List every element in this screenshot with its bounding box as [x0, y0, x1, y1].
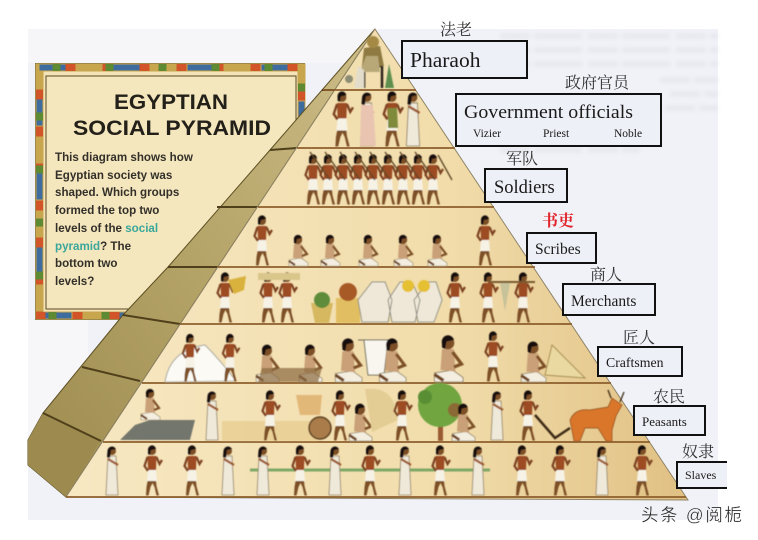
label: Scribes: Scribes	[535, 241, 581, 258]
label: Peasants	[634, 388, 705, 435]
label: Soldiers: Soldiers	[494, 178, 555, 198]
watermark: 头条 @阅栀	[641, 505, 742, 525]
level 7: peasants, birds, tree and ox	[120, 383, 624, 444]
level 3: soldiers row	[306, 152, 452, 204]
label: Slaves: Slaves	[685, 468, 717, 482]
label: Government officials: Noble	[614, 128, 642, 140]
label: Slaves	[677, 443, 727, 488]
label: Peasants: 农民	[653, 388, 685, 406]
label: Merchants	[563, 266, 655, 315]
panel heading	[73, 90, 271, 140]
level 6: craftsmen	[165, 331, 585, 382]
label: Pharaoh: Pharaoh	[410, 48, 481, 72]
panel question text: pyramid? The	[55, 240, 131, 253]
panel question text: formed the top two	[55, 204, 159, 217]
label: Government officials: Priest	[543, 128, 570, 140]
label: Scribes	[527, 211, 596, 263]
panel question text: levels of the social	[55, 222, 158, 235]
label: Government officials: 政府官员	[565, 74, 630, 92]
label: Merchants: Merchants	[571, 293, 636, 310]
panel heading: EGYPTIAN	[114, 90, 228, 114]
panel heading: SOCIAL PYRAMID	[73, 116, 271, 140]
label: Government officials	[456, 74, 661, 146]
level 1: pharaoh on throne	[345, 36, 394, 88]
pyramid front face	[66, 29, 688, 500]
panel question text: This diagram shows how	[55, 151, 194, 164]
label: Pharaoh: 法老	[440, 21, 472, 39]
label: Craftsmen	[598, 329, 682, 376]
panel question text: Egyptian society was	[55, 169, 172, 182]
level 8: slaves hauling	[106, 445, 652, 499]
label: Craftsmen: Craftsmen	[606, 355, 664, 370]
panel question text: levels?	[55, 275, 94, 288]
level dividers	[66, 90, 686, 497]
label: Pharaoh	[402, 21, 527, 78]
label: Scribes: 书吏	[542, 211, 574, 230]
label: Peasants: Peasants	[642, 414, 687, 429]
panel: Egyptian social pyramid caption	[35, 63, 305, 320]
label: Soldiers	[485, 150, 567, 202]
label: Merchants: 商人	[590, 266, 622, 284]
label: Government officials: Government officials	[464, 102, 633, 123]
level 5: merchants and goods	[218, 272, 535, 323]
label: Slaves: 奴隶	[682, 443, 714, 461]
level 4: scribes	[254, 215, 495, 266]
level 2: government officials figures	[334, 91, 420, 150]
label: Soldiers: 军队	[506, 150, 538, 168]
pyramid side face	[28, 29, 375, 497]
panel question text: shaped. Which groups	[55, 186, 179, 199]
label: Craftsmen: 匠人	[623, 329, 655, 347]
pyramid	[28, 29, 688, 500]
panel background and painted border	[35, 63, 305, 320]
label: Government officials: Vizier	[473, 128, 501, 140]
panel question text: bottom two	[55, 257, 117, 270]
